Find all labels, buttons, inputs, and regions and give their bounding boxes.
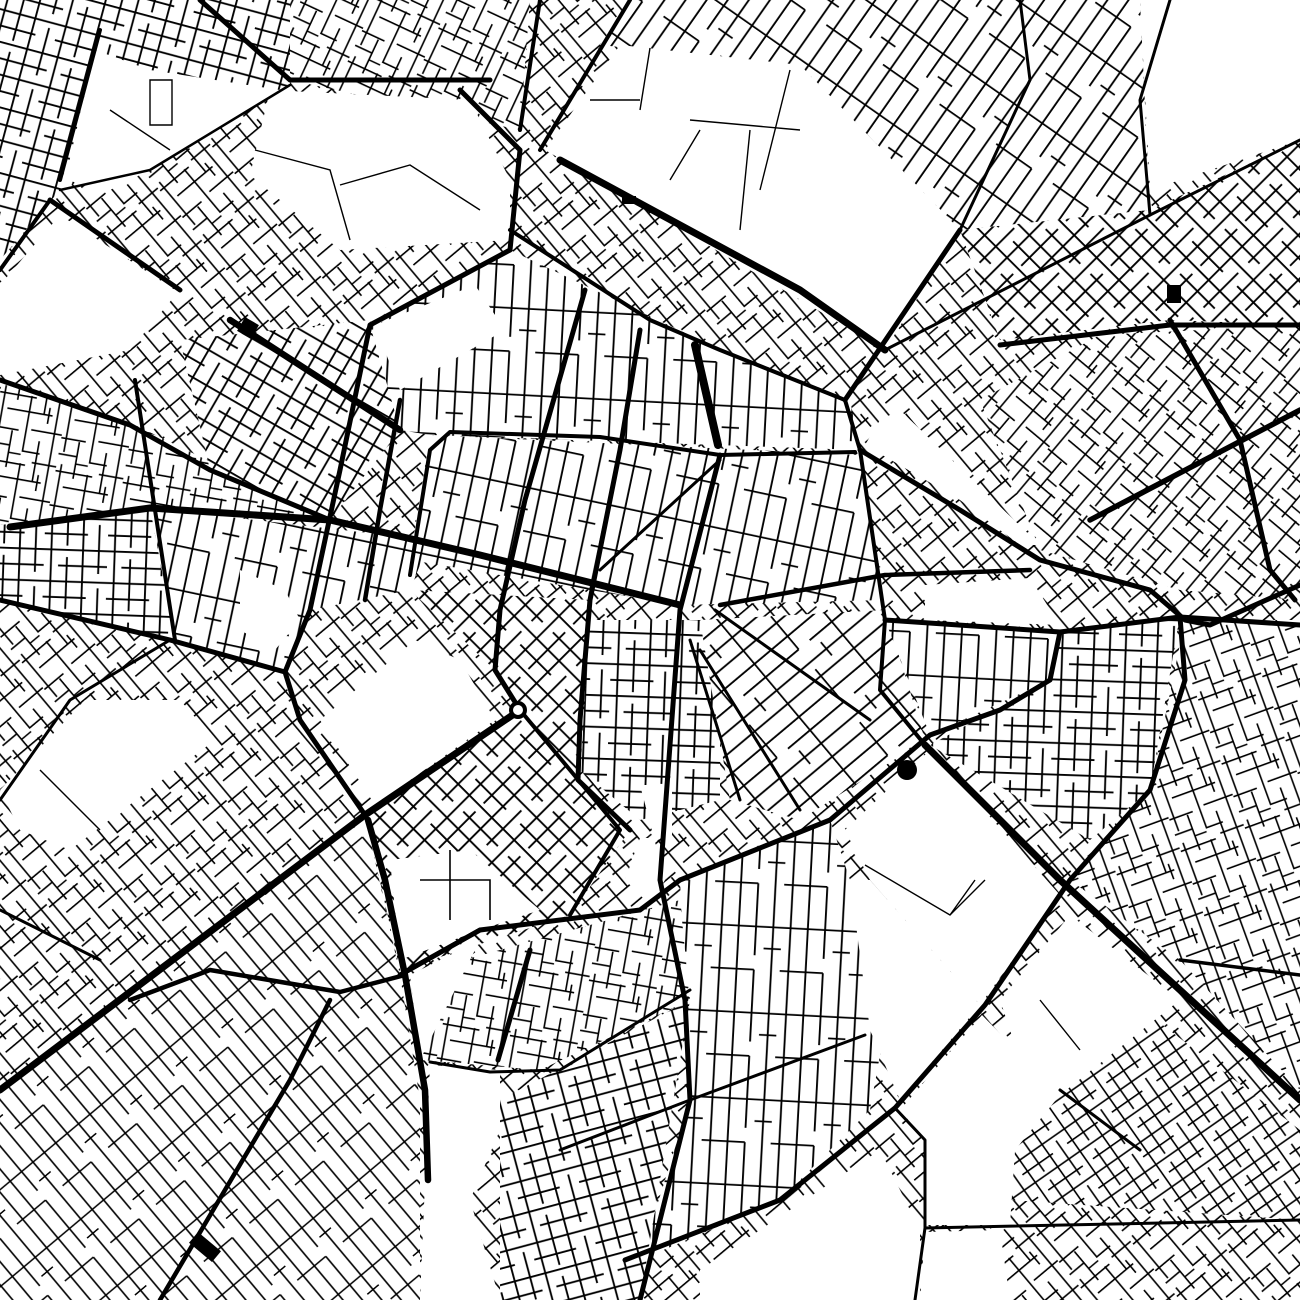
open area: south forest: [420, 1065, 500, 1300]
inner ring: [410, 432, 855, 575]
northwest roads: [50, 200, 180, 290]
north interchange: [200, 0, 490, 80]
east cross road: [885, 617, 1300, 632]
roundabout: [511, 703, 525, 717]
southwest motorway: [0, 710, 520, 1090]
southeast rail road: [400, 632, 1060, 975]
open area: north park: [545, 45, 960, 350]
radial streets: [600, 460, 870, 810]
main boulevard: [10, 508, 680, 605]
southwest arterial: [130, 970, 405, 1000]
open area: northwest park: [250, 90, 510, 250]
open area: northeast field: [1140, 0, 1300, 190]
open area: round park: [240, 570, 300, 650]
open area: mid east strip: [925, 578, 1060, 625]
open area: northwest strip: [65, 50, 280, 190]
open area: centre garden: [625, 785, 672, 905]
open area: central small park: [320, 640, 495, 805]
east boulevard: [860, 450, 1300, 625]
ring road east: [625, 617, 1185, 1260]
central north avenues: [495, 290, 585, 710]
north motorway: [560, 160, 885, 350]
open area: river belt: [865, 410, 1040, 545]
dense blocks: [189, 196, 1181, 1262]
southeast motorway: [925, 745, 1300, 1100]
south avenue: [368, 820, 428, 1180]
open area: airfield south: [1000, 915, 1180, 1095]
west arc: [0, 600, 365, 815]
southeast links: [1180, 960, 1300, 975]
open area: north block: [375, 285, 505, 390]
open area: station block: [390, 850, 540, 1060]
northeast links: [845, 230, 960, 400]
open area: south meadow: [700, 1150, 920, 1300]
west diagonals: [230, 320, 400, 430]
open area: south corner: [920, 1230, 1010, 1300]
open area: airfield edge: [850, 880, 980, 1100]
open area: southwest field: [0, 700, 215, 850]
open area: airfield north: [845, 750, 1060, 1005]
open area: west field: [0, 215, 178, 375]
mid east road: [720, 570, 1030, 605]
open area: southeast field: [900, 1015, 1060, 1225]
west lower roads: [0, 640, 170, 960]
